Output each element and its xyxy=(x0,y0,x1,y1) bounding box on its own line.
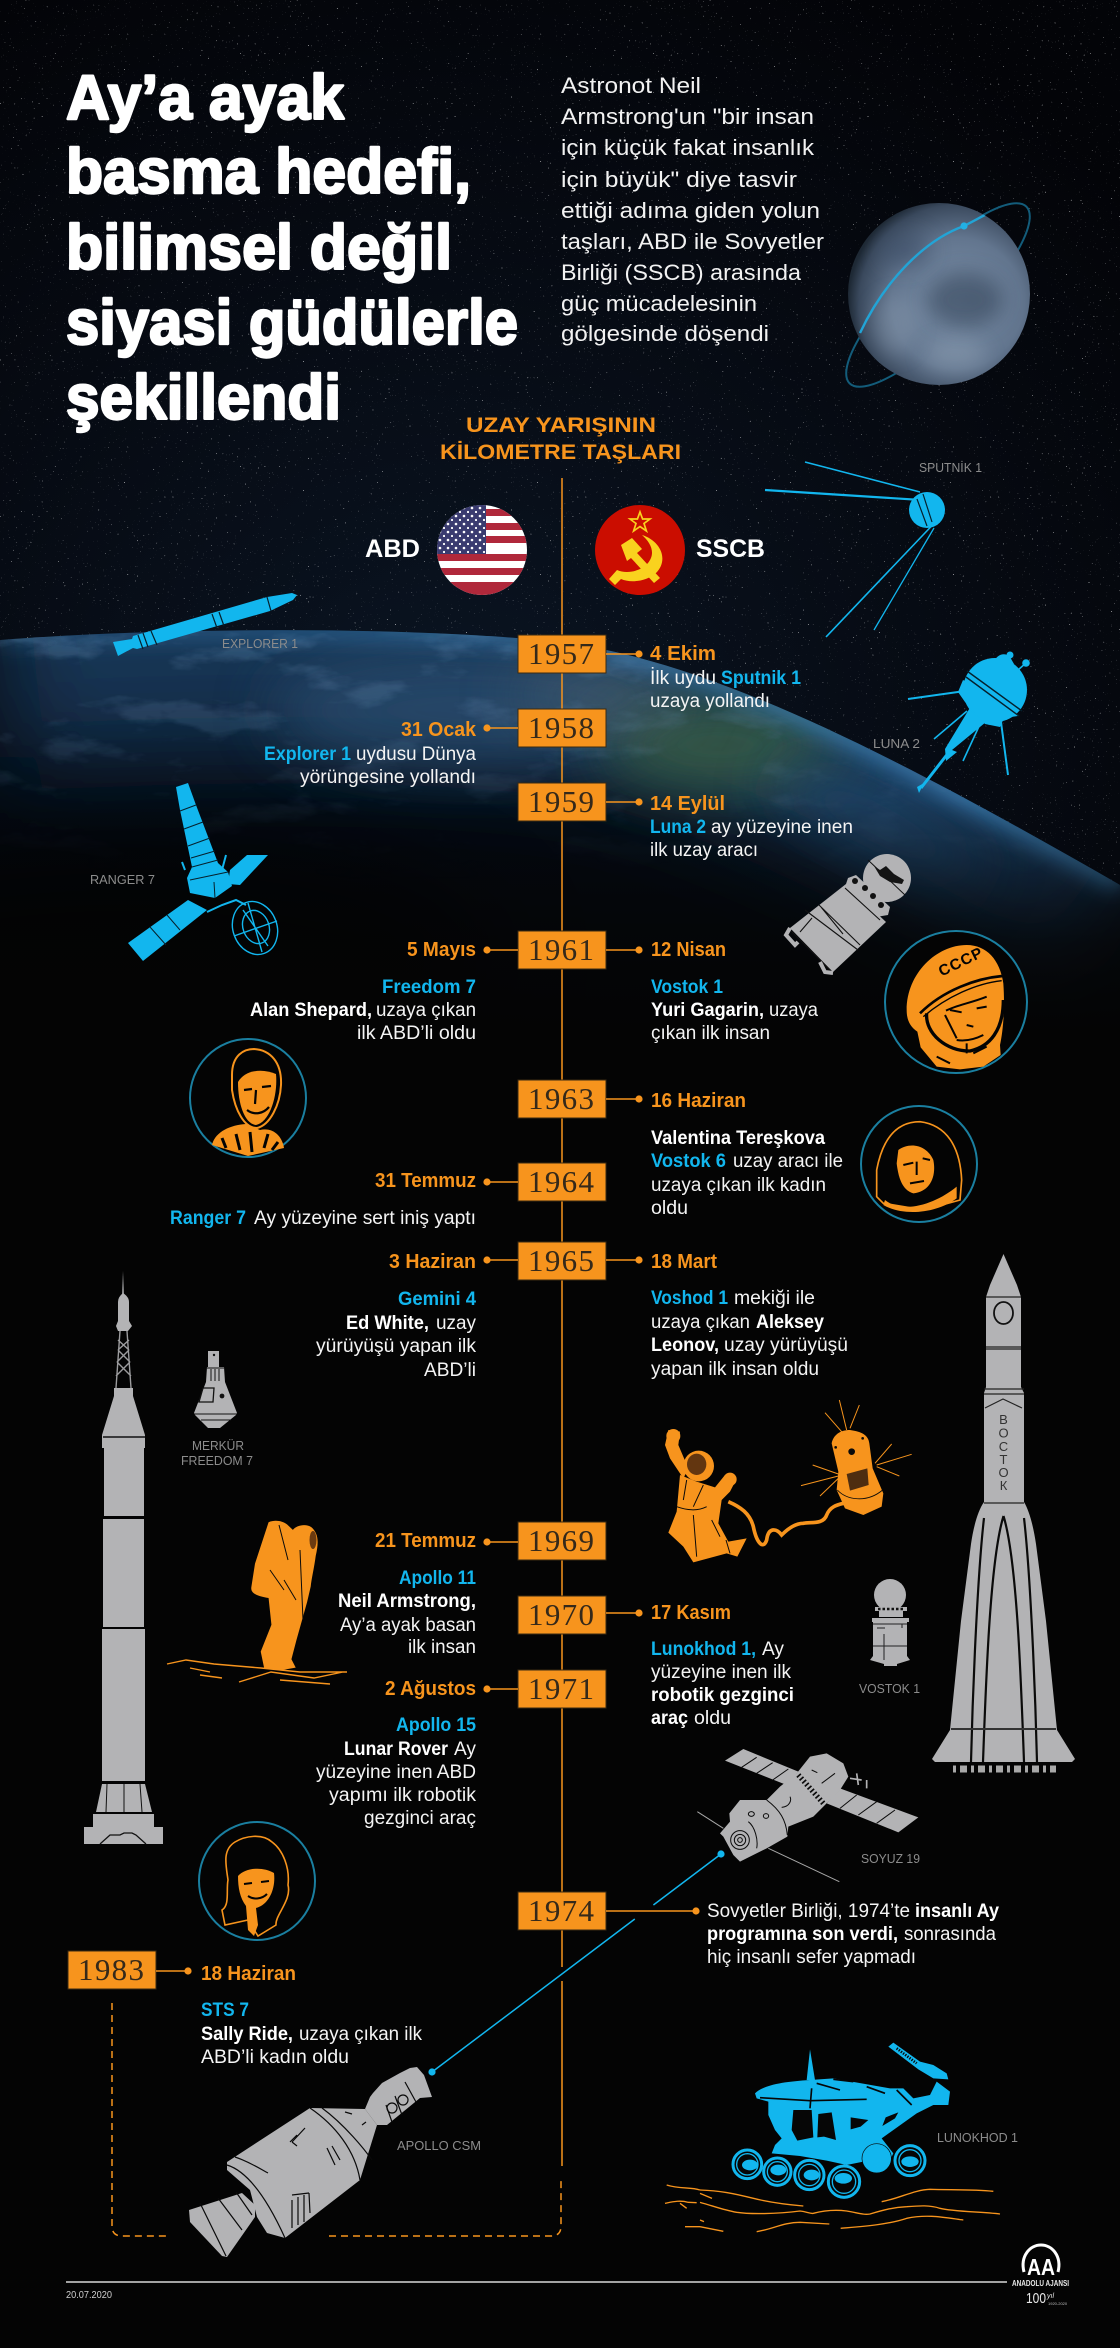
date: 17 Kasım: 17 Kasım xyxy=(651,1602,731,1624)
label: rocket lettering: К xyxy=(1000,1478,1008,1493)
illustration: Soyuz 19 xyxy=(697,1749,920,1882)
logo: Anadolu Ajansı: 1920-2020 xyxy=(1048,2301,1068,2306)
date: 31 Ocak: 31 Ocak xyxy=(401,719,477,741)
year box 1959 xyxy=(518,783,606,821)
event: 1963 xyxy=(518,1080,843,1219)
text: Lunokhod 1: Lunokhod 1, xyxy=(651,1639,756,1660)
text: Gemini 4: ABD’li xyxy=(424,1360,476,1381)
connector 1983 xyxy=(156,1967,192,1975)
connector 1958 xyxy=(483,724,518,732)
text: Voshod 1: uzaya çıkan xyxy=(651,1312,750,1333)
event: 1983 xyxy=(68,1951,422,2068)
year box 1965: 1965 xyxy=(528,1243,594,1278)
title xyxy=(66,63,518,433)
event: 1974 xyxy=(518,1892,999,1968)
text: Vostok 6: uzay aracı ile xyxy=(733,1151,843,1172)
timeline heading: UZAY YARIŞININ xyxy=(466,414,656,437)
text: Voshod 1: yapan ilk insan oldu xyxy=(651,1359,819,1380)
year box 1965 xyxy=(518,1242,606,1280)
portrait: Tereshkova xyxy=(861,1106,977,1222)
text: Luna 2: ay yüzeyine inen xyxy=(711,817,853,838)
connector: Apollo CSM to Soyuz 19 xyxy=(428,1850,725,2076)
footer rule xyxy=(66,2281,1007,2283)
event: 1971 xyxy=(316,1670,606,1829)
text: Gemini 4: yürüyüşü yapan ilk xyxy=(316,1336,476,1357)
illustration: Ranger 7 xyxy=(90,783,285,961)
text: Apollo 11: ilk insan xyxy=(408,1637,476,1658)
illustration: Sputnik 1 xyxy=(765,461,982,637)
year box 1961 xyxy=(518,931,606,969)
label: rocket lettering: В xyxy=(999,1412,1008,1427)
year box 1961: 1961 xyxy=(528,932,594,967)
text: STS 7 xyxy=(201,2000,422,2068)
text: STS 7: Sally Ride, xyxy=(201,2024,293,2045)
text: Soviet programme end xyxy=(707,1901,999,1968)
text: Apollo 11: Apollo 11 xyxy=(399,1568,476,1589)
label: Soyuz 19: SOYUZ 19 xyxy=(861,1852,920,1866)
intro text: Astronot Neil xyxy=(561,73,701,98)
label: Mercury Freedom 7: MERKÜR xyxy=(192,1439,244,1453)
text: Lunokhod 1: Ay xyxy=(762,1639,784,1660)
illustration: Vostok 1 capsule xyxy=(859,1579,920,1696)
logo: Anadolu Ajansı: yıl xyxy=(1046,2293,1054,2300)
text: Lunokhod 1: yüzeyine inen ilk xyxy=(651,1662,791,1683)
text: Soviet programme end: hiç insanlı sefer yapmadı xyxy=(707,1947,916,1968)
text: Freedom 7: Alan Shepard, xyxy=(250,1000,372,1021)
date: 16 Haziran: 16 Haziran xyxy=(651,1090,746,1112)
event: 1970 xyxy=(518,1596,794,1729)
intro text: güç mücadelesinin xyxy=(561,291,757,316)
text: Apollo 15: Apollo 15 xyxy=(396,1715,476,1736)
intro text: Armstrong'un "bir insan xyxy=(561,104,814,129)
text: Explorer 1: uydusu Dünya xyxy=(356,744,476,765)
date: 12 Nisan: 12 Nisan xyxy=(651,939,726,961)
illustration: Luna 2 xyxy=(873,652,1030,793)
date: 2 Ağustos: 2 Ağustos xyxy=(385,1678,476,1700)
title: Ay’a ayak xyxy=(66,63,345,133)
illustration: Lunokhod 1 xyxy=(665,2043,1018,2232)
connectors 1961 xyxy=(483,946,643,954)
year box 1964 xyxy=(518,1163,606,1201)
connector 1959 xyxy=(606,798,643,806)
year box 1969 xyxy=(518,1522,606,1560)
year box 1958: 1958 xyxy=(528,710,594,745)
title: bilimsel değil xyxy=(66,213,452,283)
footer date: 20.07.2020 xyxy=(66,2290,112,2301)
intro text: taşları, ABD ile Sovyetler xyxy=(561,229,824,254)
event: 1959 xyxy=(518,783,853,861)
text: Sputnik 1: uzaya yollandı xyxy=(650,691,770,712)
text: Voshod 1: Leonov, xyxy=(651,1335,719,1356)
intro text: için küçük fakat insanlık xyxy=(561,135,815,160)
label: ABD: ABD xyxy=(365,535,420,563)
text: Apollo 15 xyxy=(316,1715,477,1829)
label: Mercury Freedom 7 xyxy=(181,1439,253,1468)
connectors 1965 xyxy=(483,1256,643,1264)
label: Sputnik 1: SPUTNİK 1 xyxy=(919,461,982,475)
intro text: için büyük" diye tasvir xyxy=(561,167,797,192)
background: earth horizon xyxy=(0,630,1120,1040)
label: rocket lettering: О xyxy=(998,1426,1009,1440)
date: 3 Haziran: 3 Haziran xyxy=(389,1251,476,1273)
connector 1971 xyxy=(483,1685,518,1693)
title: siyasi güdülerle xyxy=(66,288,518,358)
text: Ranger 7: Ranger 7 xyxy=(170,1208,246,1229)
connector 1974 xyxy=(606,1907,700,1915)
text: Freedom 7: uzaya çıkan xyxy=(376,1000,476,1021)
portrait: Sally Ride xyxy=(199,1822,315,1940)
logo: Anadolu Ajansı xyxy=(1012,2245,1069,2307)
illustration: Armstrong on the Moon xyxy=(167,1521,347,1684)
label: Luna 2: LUNA 2 xyxy=(873,737,920,751)
label: Explorer 1: EXPLORER 1 xyxy=(222,637,298,651)
text: Sputnik 1: İlk uydu xyxy=(650,668,716,689)
year box 1970: 1970 xyxy=(528,1597,594,1632)
text: Vostok 6: Valentina Tereşkova xyxy=(651,1128,825,1149)
text: Gemini 4 xyxy=(316,1289,476,1381)
text: Explorer 1 xyxy=(264,744,476,788)
year box 1974 xyxy=(518,1892,606,1930)
text: Soviet programme end: programına son verdi, xyxy=(707,1924,898,1945)
year box 1983: 1983 xyxy=(78,1952,144,1987)
illustration: Leonov spacewalk xyxy=(665,1400,912,1562)
text: Vostok 6: Vostok 6 xyxy=(651,1151,726,1172)
text: Lunokhod 1 xyxy=(651,1639,794,1729)
illustration: Explorer 1 xyxy=(113,593,298,656)
year box 1958 xyxy=(518,709,606,747)
date: 31 Temmuz: 31 Temmuz xyxy=(375,1170,476,1192)
text: Vostok 1: uzaya xyxy=(769,1000,818,1021)
text: Explorer 1: yörüngesine yollandı xyxy=(300,767,476,788)
year box 1963: 1963 xyxy=(528,1081,594,1116)
icon: USSR flag xyxy=(595,505,685,595)
year box 1974: 1974 xyxy=(528,1893,594,1928)
text: Soviet programme end: sonrasında xyxy=(904,1924,996,1945)
text: Apollo 11 xyxy=(338,1568,476,1658)
event: 1964 xyxy=(170,1163,606,1229)
text: Vostok 1: Yuri Gagarin, xyxy=(651,1000,764,1021)
text: Luna 2: Luna 2 xyxy=(650,817,706,838)
text: Apollo 11: Neil Armstrong, xyxy=(338,1591,476,1612)
portrait: Gagarin xyxy=(885,931,1027,1073)
illustration: moon with orbit xyxy=(845,202,1031,388)
text: Apollo 15: yüzeyine inen ABD xyxy=(316,1762,476,1783)
date: 18 Mart: 18 Mart xyxy=(651,1251,717,1273)
label: rocket lettering: Т xyxy=(1000,1452,1008,1467)
label: rocket lettering: С xyxy=(999,1439,1008,1454)
text: Freedom 7: ilk ABD’li oldu xyxy=(357,1023,476,1044)
text: Soviet programme end: Sovyetler Birliği, 1974’te xyxy=(707,1901,910,1922)
text: Luna 2 xyxy=(650,817,853,861)
year box 1957: 1957 xyxy=(528,636,594,671)
intro text xyxy=(561,73,824,346)
icon: USA flag xyxy=(437,505,527,595)
text: Luna 2: ilk uzay aracı xyxy=(650,840,758,861)
event: 1961 xyxy=(250,931,818,1044)
text: Vostok 6: oldu xyxy=(651,1198,688,1219)
text: Vostok 6: uzaya çıkan ilk kadın xyxy=(651,1175,826,1196)
event: 1965 xyxy=(316,1242,848,1381)
text: Vostok 1: çıkan ilk insan xyxy=(651,1023,770,1044)
text: Voshod 1: Voshod 1 xyxy=(651,1288,728,1309)
date: 21 Temmuz: 21 Temmuz xyxy=(375,1530,476,1552)
illustration: Redstone rocket xyxy=(84,1271,163,1844)
text: Gemini 4: uzay xyxy=(436,1313,476,1334)
text: Sputnik 1 xyxy=(650,668,801,712)
event: 1958 xyxy=(264,709,606,788)
event: 1969 xyxy=(338,1522,606,1658)
logo: Anadolu Ajansı: 100 xyxy=(1026,2290,1046,2307)
text: Apollo 15: Ay xyxy=(454,1739,476,1760)
text: Vostok 1 xyxy=(651,977,818,1044)
text: Vostok 6 xyxy=(651,1128,843,1219)
title: şekillendi xyxy=(66,363,341,433)
year box 1957 xyxy=(518,635,606,673)
year box 1964: 1964 xyxy=(528,1164,594,1199)
label: Ranger 7: RANGER 7 xyxy=(90,873,155,887)
text: Voshod 1: uzay yürüyüşü xyxy=(724,1335,848,1356)
label: Mercury Freedom 7: FREEDOM 7 xyxy=(181,1454,253,1468)
title: basma hedefi, xyxy=(66,137,471,207)
text: Sputnik 1: Sputnik 1 xyxy=(721,668,801,689)
year box 1970 xyxy=(518,1596,606,1634)
text: Vostok 1: Vostok 1 xyxy=(651,977,723,998)
text: Apollo 15: yapımı ilk robotik xyxy=(329,1785,477,1806)
portrait: Shepard xyxy=(190,1039,306,1157)
text: Apollo 11: Ay’a ayak basan xyxy=(340,1615,476,1636)
text: Lunokhod 1: robotik gezginci xyxy=(651,1685,794,1706)
text: STS 7: STS 7 xyxy=(201,2000,249,2021)
timeline heading xyxy=(440,414,681,464)
date: 4 Ekim: 4 Ekim xyxy=(650,643,716,665)
label: Apollo CSM: APOLLO CSM xyxy=(397,2139,481,2153)
timeline heading: KİLOMETRE TAŞLARI xyxy=(440,441,681,464)
text: Apollo 15: Lunar Rover xyxy=(344,1739,449,1760)
illustration: Mercury capsule xyxy=(181,1351,253,1468)
text: Apollo 15: gezginci araç xyxy=(364,1808,476,1829)
text: Explorer 1: Explorer 1 xyxy=(264,744,351,765)
connector 1963 xyxy=(606,1095,643,1103)
date: 5 Mayıs: 5 Mayıs xyxy=(407,939,476,961)
logo: Anadolu Ajansı: AA xyxy=(1027,2254,1055,2280)
text: Voshod 1 xyxy=(651,1288,848,1380)
text: STS 7: uzaya çıkan ilk xyxy=(299,2024,422,2045)
label: rocket lettering: О xyxy=(998,1465,1009,1480)
year box 1971 xyxy=(518,1670,606,1708)
year box 1963 xyxy=(518,1080,606,1118)
text: Lunokhod 1: oldu xyxy=(694,1708,731,1729)
illustration: Apollo CSM xyxy=(189,2067,481,2257)
date: 14 Eylül: 14 Eylül xyxy=(650,793,725,815)
year box 1971: 1971 xyxy=(528,1671,594,1706)
text: Lunokhod 1: araç xyxy=(651,1708,688,1729)
year box 1969: 1969 xyxy=(528,1523,594,1558)
intro text: gölgesinde döşendi xyxy=(561,321,769,346)
timeline axis xyxy=(112,478,562,2236)
logo: Anadolu Ajansı: ANADOLU AJANSI xyxy=(1012,2279,1069,2288)
illustration: Vostok rocket xyxy=(932,1254,1075,1769)
connector 1964 xyxy=(483,1178,518,1186)
label: Lunokhod 1: LUNOKHOD 1 xyxy=(937,2131,1018,2145)
text: Voshod 1: Aleksey xyxy=(756,1312,824,1333)
illustration: Vostok capsule xyxy=(786,854,911,973)
text: STS 7: ABD’li kadın oldu xyxy=(201,2047,349,2068)
event: 1957 xyxy=(518,635,801,712)
label: SSCB: SSCB xyxy=(696,535,765,563)
text: Gemini 4: Ed White, xyxy=(346,1313,429,1334)
text: Freedom 7: Freedom 7 xyxy=(382,977,476,998)
date: 18 Haziran: 18 Haziran xyxy=(201,1963,296,1985)
connector 1970 xyxy=(606,1609,643,1617)
text: Freedom 7 xyxy=(250,977,476,1044)
text: Voshod 1: mekiği ile xyxy=(734,1288,815,1309)
text: Soviet programme end: insanlı Ay xyxy=(915,1901,999,1922)
connector 1969 xyxy=(483,1538,518,1546)
portrait: Gagarin: CCCP xyxy=(936,945,985,980)
intro text: Birliği (SSCB) arasında xyxy=(561,260,802,285)
text: Gemini 4: Gemini 4 xyxy=(398,1289,476,1310)
label: Vostok 1: VOSTOK 1 xyxy=(859,1682,920,1696)
year box 1983 xyxy=(68,1951,156,1989)
text: Ranger 7: Ay yüzeyine sert iniş yaptı xyxy=(254,1208,476,1229)
intro text: ettiği adıma giden yolun xyxy=(561,198,820,223)
year box 1959: 1959 xyxy=(528,784,594,819)
connector 1957 xyxy=(606,650,643,658)
